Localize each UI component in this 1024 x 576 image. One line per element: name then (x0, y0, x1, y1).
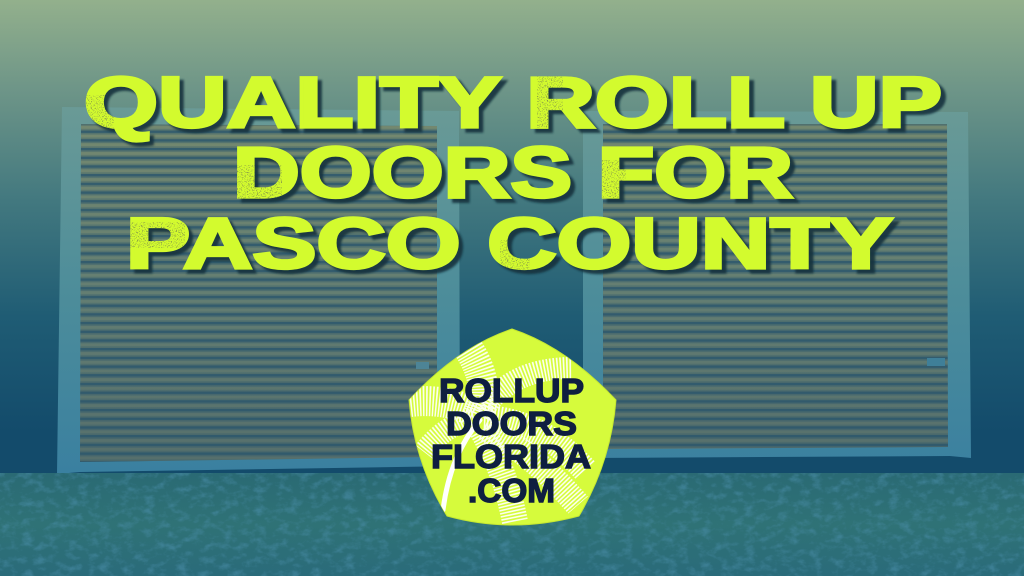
icon: palm tree (410, 348, 585, 522)
logo text: DOORS (446, 405, 577, 442)
logo badge (409, 329, 616, 525)
right door frame (583, 111, 971, 458)
title shadow: PASCO COUNTY (130, 209, 898, 288)
title text: QUALITY ROLL UP (84, 64, 942, 143)
left door curtain (80, 124, 437, 462)
logo text: ROLLUP (439, 372, 584, 409)
right roll up door (583, 111, 971, 458)
badge shape (409, 329, 616, 525)
title text: DOORS FOR (233, 134, 793, 213)
title (84, 64, 947, 288)
right door handle (927, 358, 945, 366)
right door curtain (603, 124, 948, 449)
title text: PASCO COUNTY (126, 205, 893, 284)
grass foreground (0, 473, 1024, 576)
logo text: FLORIDA (431, 438, 591, 475)
logo text (431, 372, 591, 509)
left roll up door (57, 107, 460, 474)
logo text: .COM (468, 472, 555, 509)
left door handle (416, 362, 429, 369)
title shadow: QUALITY ROLL UP (88, 68, 947, 147)
title text (84, 64, 942, 284)
left door frame (57, 107, 460, 474)
title shadow: DOORS FOR (237, 138, 798, 217)
title shadow (88, 68, 947, 288)
